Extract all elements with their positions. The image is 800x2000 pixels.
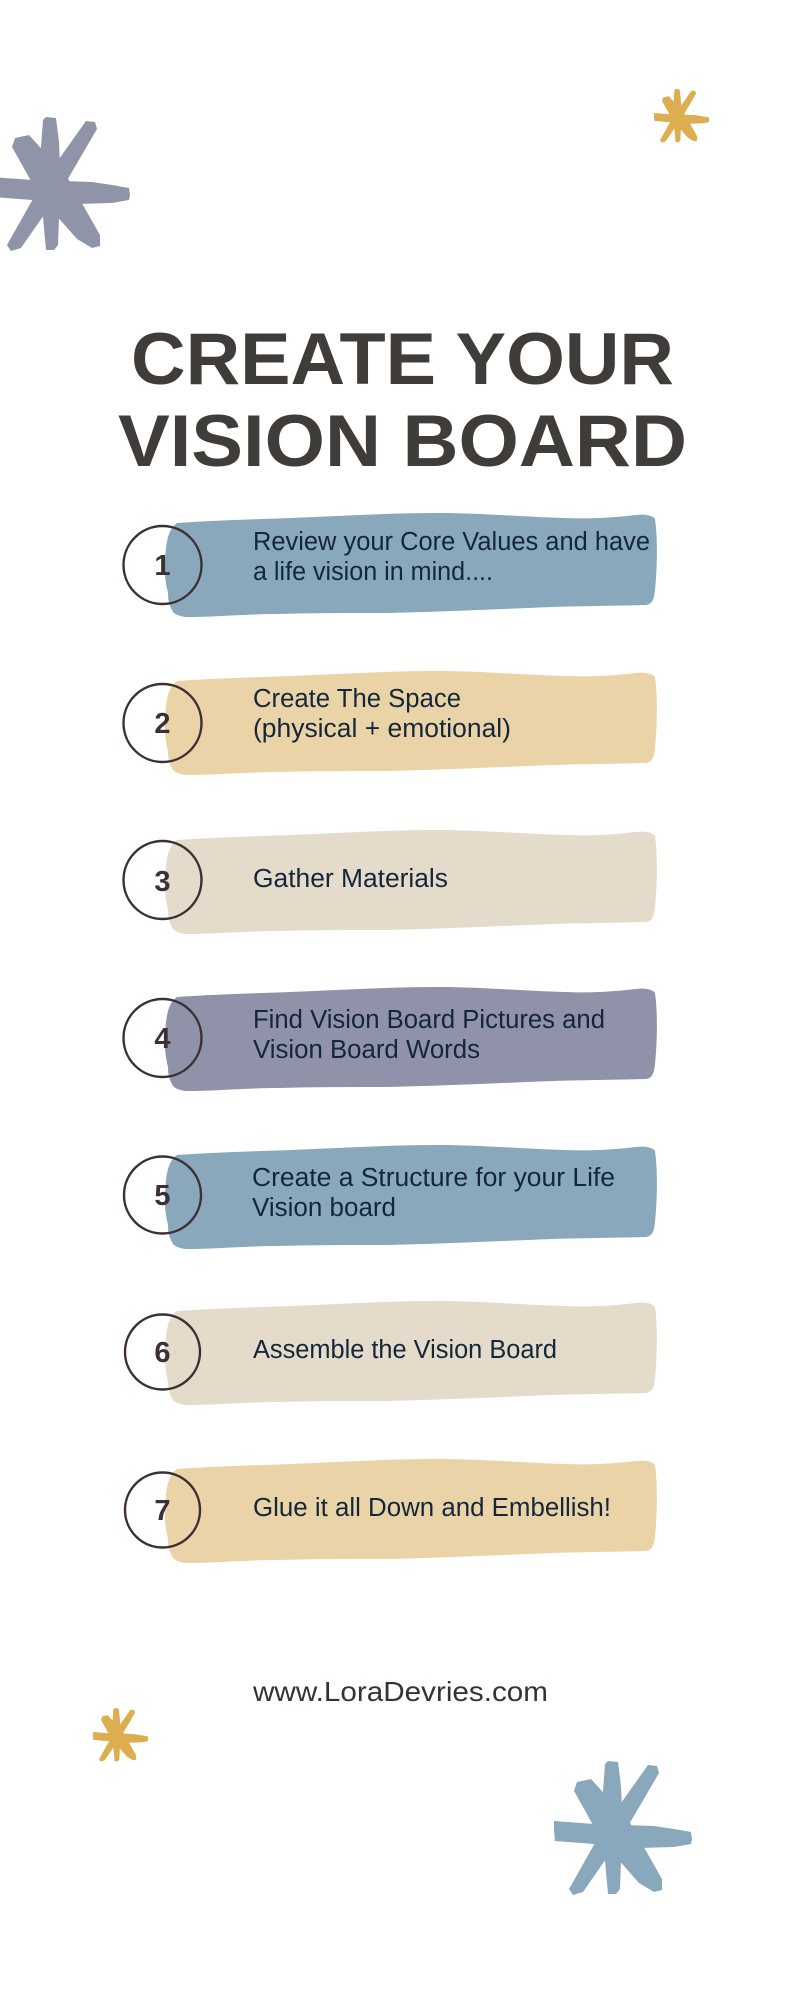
step 3: 3 [154, 866, 171, 898]
title: CREATE YOUR [131, 319, 674, 400]
step 4 [124, 987, 657, 1091]
icon: small gold brush star bottom left [93, 1708, 148, 1762]
website footer: www.LoraDevries.com [252, 1676, 548, 1707]
step 7: 7 [154, 1495, 171, 1527]
title [118, 319, 687, 482]
step 5: Vision board [252, 1194, 396, 1222]
step 5 [124, 1145, 657, 1249]
step 1: a life vision in mind.... [253, 558, 493, 586]
step 7 [125, 1459, 657, 1563]
step 5: Create a Structure for your Life [252, 1164, 615, 1192]
icon: large blue brush star bottom right [554, 1761, 692, 1895]
step 1: 1 [154, 550, 171, 582]
step 7: Glue it all Down and Embellish! [253, 1494, 611, 1522]
step 4: Vision Board Words [253, 1036, 480, 1064]
step 4: Find Vision Board Pictures and [253, 1006, 605, 1034]
step 2: Create The Space [253, 685, 461, 713]
step 1 [124, 513, 657, 617]
step 4: 4 [154, 1023, 171, 1055]
step 2: (physical + emotional) [253, 715, 511, 743]
icon: large grey brush star [0, 117, 130, 251]
step 2 [124, 671, 657, 775]
step 3 [124, 830, 657, 934]
step 2: 2 [154, 708, 171, 740]
step 3: Gather Materials [253, 865, 448, 893]
step 1: Review your Core Values and have [253, 528, 650, 556]
step 5: 5 [154, 1180, 171, 1212]
step 6: Assemble the Vision Board [253, 1336, 557, 1364]
step 6 [125, 1301, 657, 1405]
icon: small gold brush star top right [654, 89, 709, 143]
step 6: 6 [154, 1337, 171, 1369]
title: VISION BOARD [118, 401, 687, 482]
